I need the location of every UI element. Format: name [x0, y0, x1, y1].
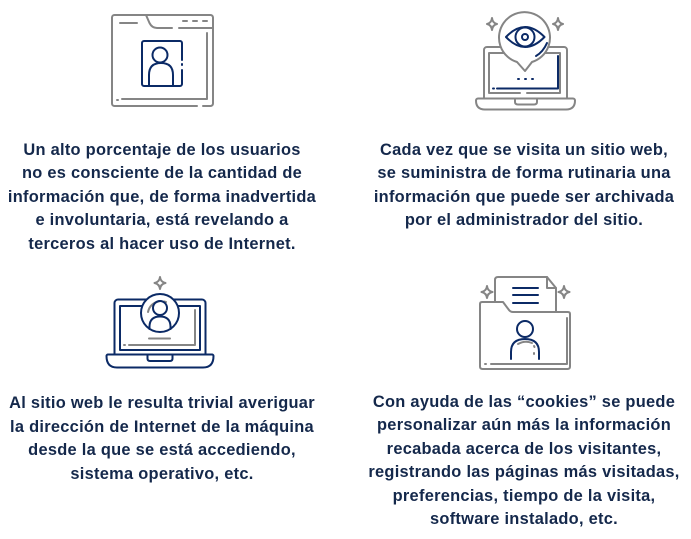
text block: top left: terceros al hacer uso de Internet.	[28, 235, 296, 253]
text block: top right: por el administrador del sitio.	[405, 211, 643, 229]
text block: bottom left: desde la que se está accediendo,	[28, 441, 296, 459]
text block: top left	[8, 140, 316, 253]
text block: bottom left: sistema operativo, etc.	[70, 465, 254, 483]
text block: bottom right: software instalado, etc.	[430, 510, 618, 528]
icon: browser window with user profile	[112, 15, 213, 106]
text block: bottom left	[9, 394, 315, 483]
text block: bottom left: Al sitio web le resulta trivial averiguar	[9, 394, 315, 412]
text block: bottom right: recabada acerca de los visitantes,	[387, 440, 661, 458]
text block: bottom right: personalizar aún más la información	[377, 416, 671, 434]
icon: folder with document and user	[480, 277, 570, 369]
text block: top left: e involuntaria, está revelando a	[35, 211, 289, 229]
text block: top right: información que puede ser archivada	[374, 188, 674, 206]
text block: top right: Cada vez que se visita un sitio web,	[380, 140, 668, 158]
text block: bottom right: Con ayuda de las “cookies” se puede	[373, 392, 675, 410]
icon: laptop with user avatar	[106, 277, 214, 368]
text block: top right	[374, 140, 674, 229]
text block: bottom left: la dirección de Internet de la máquina	[10, 418, 314, 436]
text block: bottom right: registrando las páginas más visitadas,	[368, 463, 680, 481]
icon: laptop with eye speech bubble	[476, 12, 575, 109]
text block: top left: no es consciente de la cantidad de	[22, 164, 302, 182]
text block: bottom right: preferencias, tiempo de la visita,	[393, 487, 655, 505]
text block: top left: información que, de forma inadvertida	[8, 188, 316, 206]
text block: bottom right	[368, 392, 680, 528]
text block: top right: se suministra de forma rutinaria una	[377, 164, 671, 182]
text block: top left: Un alto porcentaje de los usuarios	[23, 140, 301, 158]
